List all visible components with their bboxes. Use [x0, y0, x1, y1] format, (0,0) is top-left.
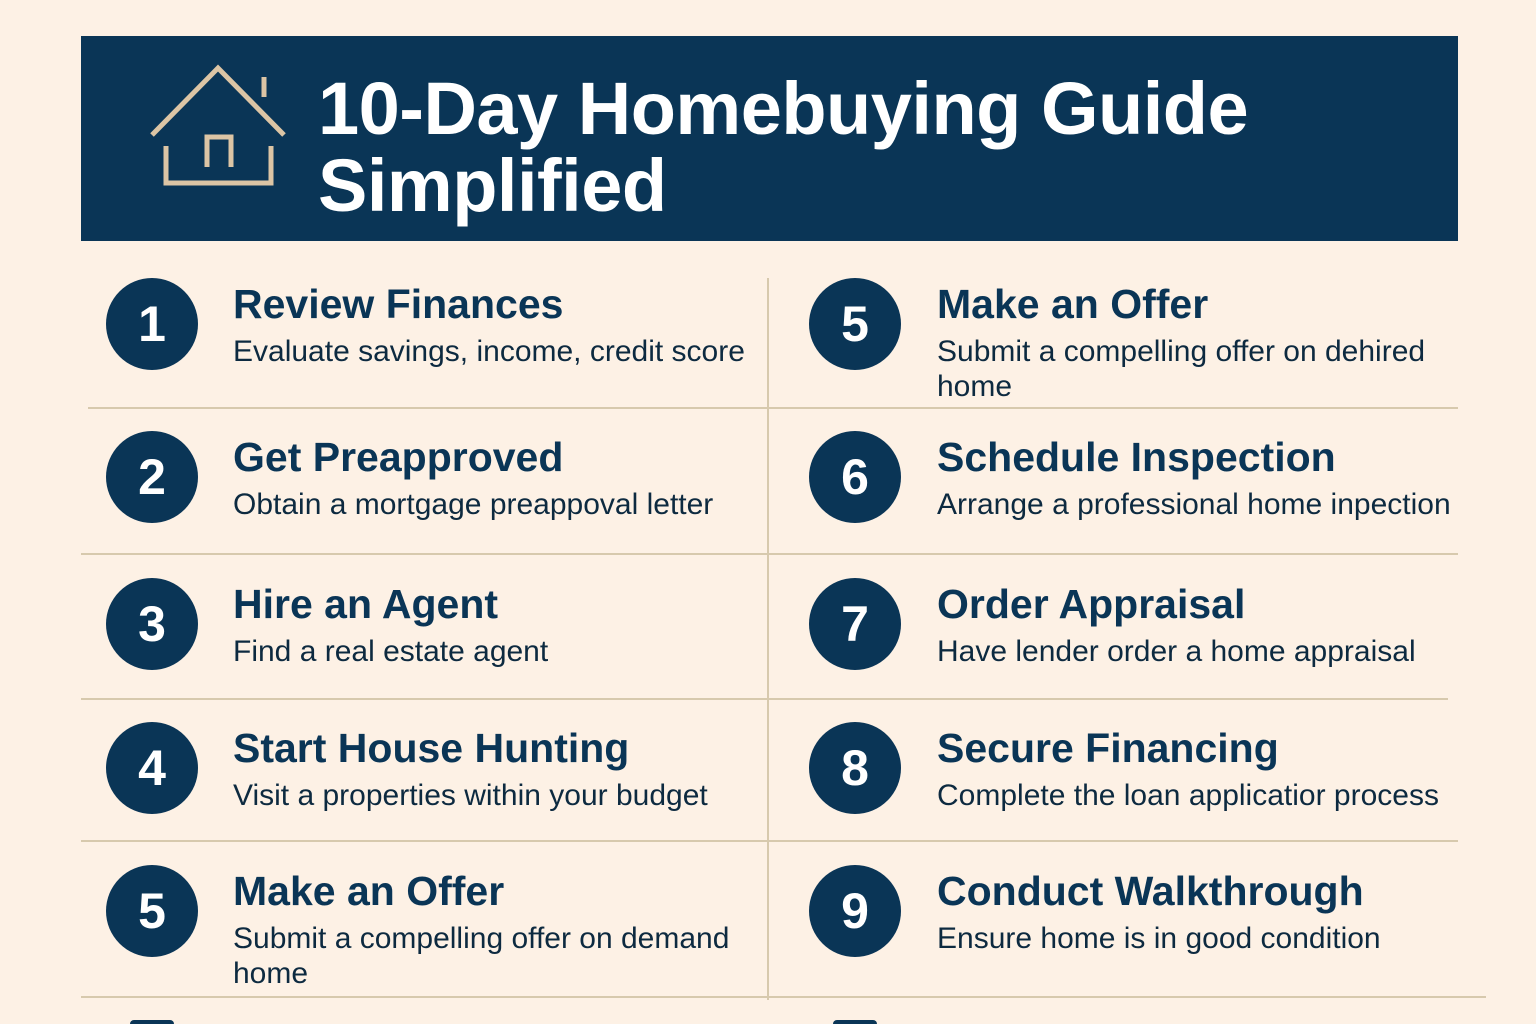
step 6: Arrange a professional home inpection: [937, 488, 1451, 521]
step 9: [809, 865, 1381, 957]
step 5 right: 5: [841, 296, 869, 352]
step 7: [809, 578, 1416, 670]
step 4: Start House Hunting: [233, 725, 629, 771]
step 4: 4: [138, 740, 166, 796]
step 8: [809, 722, 1439, 814]
step 1: 1: [138, 296, 166, 352]
step 8: Secure Financing: [937, 725, 1279, 771]
icon: house: [150, 64, 286, 186]
step 9: Ensure home is in good condition: [937, 922, 1381, 955]
step 3: 3: [138, 596, 166, 652]
step 2: Get Preapproved: [233, 434, 563, 480]
step 1: Evaluate savings, income, credit score: [233, 335, 745, 368]
step 5 right: Make an Offer: [937, 281, 1208, 327]
step 7: Have lender order a home appraisal: [937, 635, 1416, 668]
step 8: 8: [841, 740, 869, 796]
step 7: Order Appraisal: [937, 581, 1245, 627]
step 2: 2: [138, 449, 166, 505]
step 1: Review Finances: [233, 281, 563, 327]
header banner: [81, 36, 1458, 241]
step 6: [809, 431, 1451, 523]
step 5 left: Submit a compelling offer on demand: [233, 922, 729, 955]
step 5 left: home: [233, 957, 308, 990]
step 2: Obtain a mortgage preappoval letter: [233, 488, 713, 521]
step 5 left: Make an Offer: [233, 868, 504, 914]
step 5 left: 5: [138, 883, 166, 939]
step 2: [106, 431, 713, 523]
step 9: 9: [841, 883, 869, 939]
step 1: [106, 278, 745, 370]
partial circle left: [130, 1020, 174, 1024]
title: Simplified: [318, 144, 667, 227]
title: 10-Day Homebuying Guide: [318, 67, 1248, 150]
step 3: Hire an Agent: [233, 581, 498, 627]
step 7: 7: [841, 596, 869, 652]
step 3: Find a real estate agent: [233, 635, 548, 668]
step 4: Visit a properties within your budget: [233, 779, 708, 812]
step 5 right: home: [937, 370, 1012, 403]
step 3: [106, 578, 548, 670]
partial circle right: [833, 1020, 877, 1024]
step 8: Complete the loan applicatior process: [937, 779, 1439, 812]
step 6: 6: [841, 449, 869, 505]
step 4: [106, 722, 708, 814]
step 6: Schedule Inspection: [937, 434, 1336, 480]
step 9: Conduct Walkthrough: [937, 868, 1364, 914]
step 5 left: [106, 865, 729, 990]
step 5 right: [809, 278, 1425, 403]
title: [318, 67, 1248, 227]
step 5 right: Submit a compelling offer on dehired: [937, 335, 1425, 368]
